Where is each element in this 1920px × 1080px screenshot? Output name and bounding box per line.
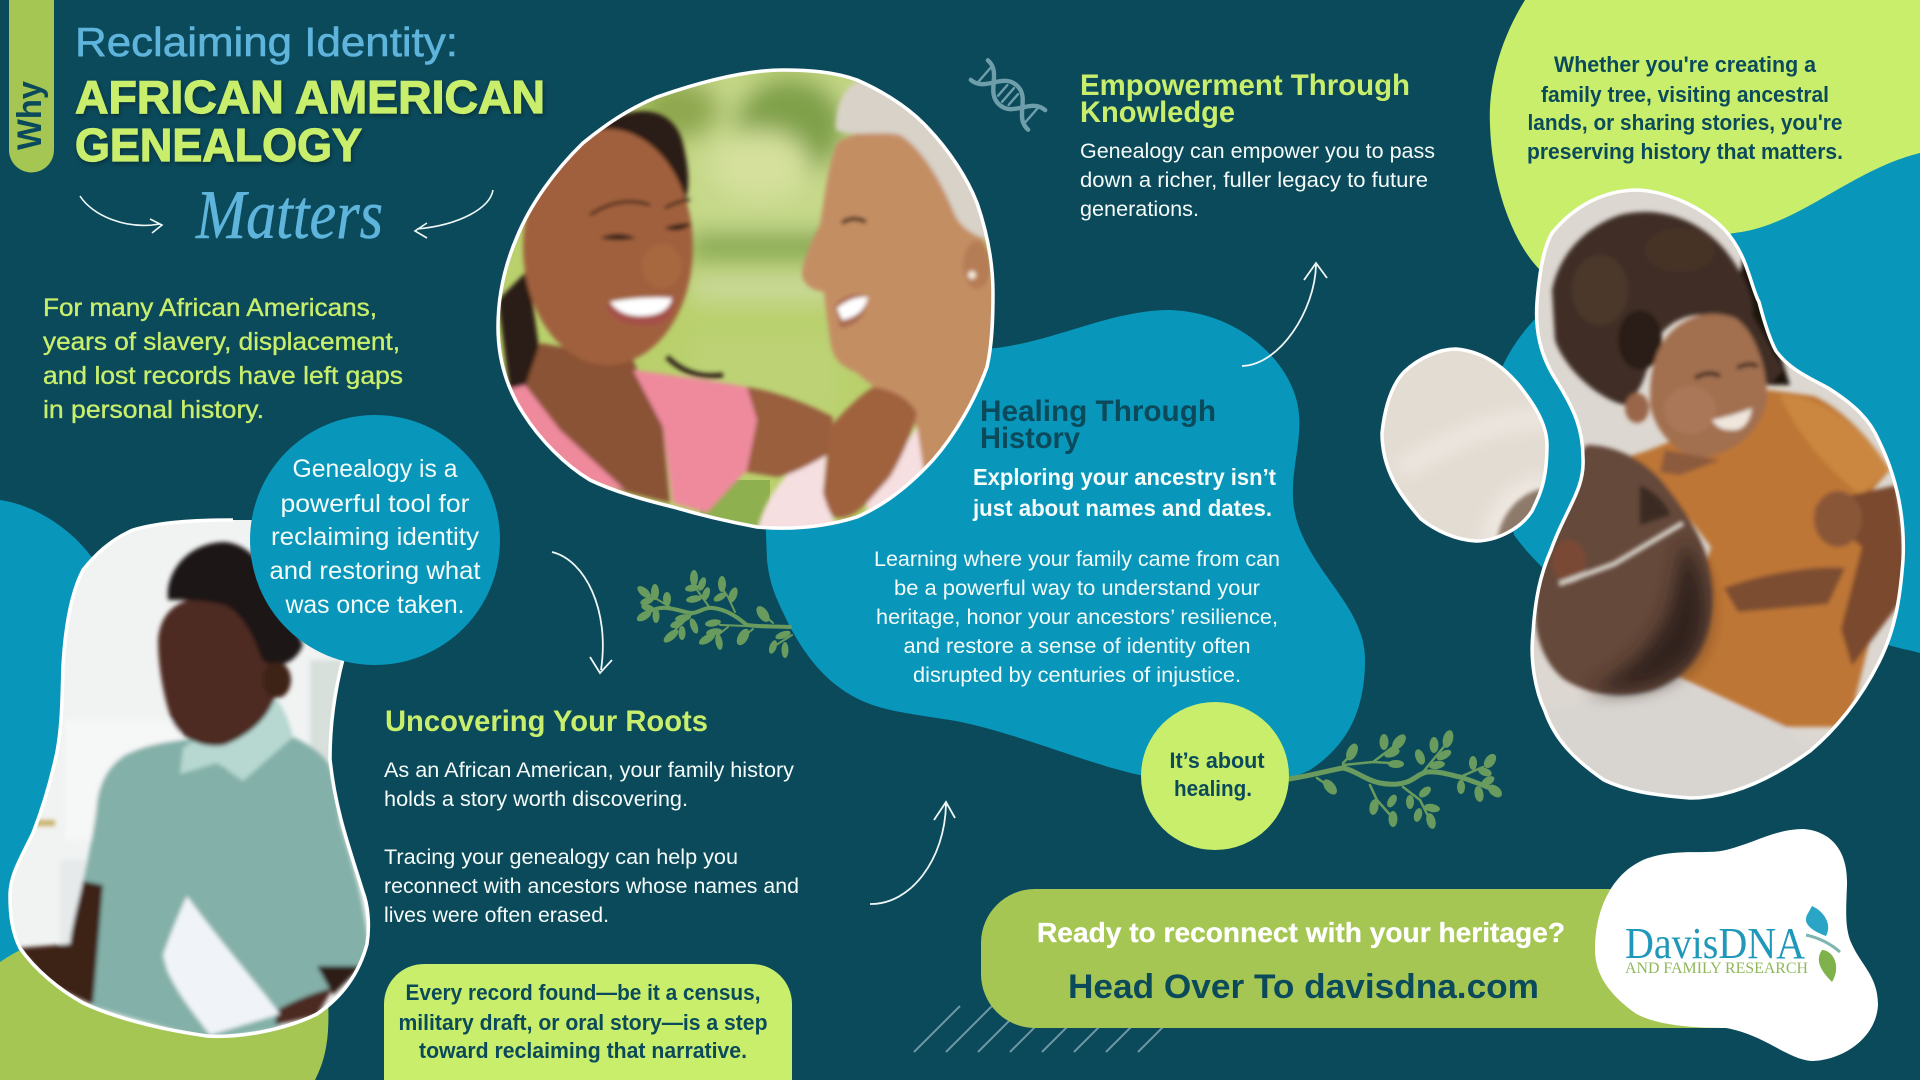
title: GENEALOGY xyxy=(75,119,362,171)
blob: top right lime xyxy=(1490,0,1920,270)
arrow: title left xyxy=(80,196,162,233)
icon: left branch xyxy=(635,570,792,658)
photo: father and child xyxy=(1525,185,1910,805)
section: Uncovering Your Roots: reconnect with ancestors whose names and xyxy=(384,874,799,898)
arrow: up to healing xyxy=(870,802,955,904)
callout: teal circle: powerful tool for xyxy=(280,490,470,518)
callout: top right text: preserving history that matters. xyxy=(1527,139,1843,164)
section: Empowerment Through Knowledge: Genealogy can empower you to pass xyxy=(1080,139,1435,163)
intro text xyxy=(43,294,403,424)
callout: top right text: lands, or sharing stories, you're xyxy=(1528,110,1842,135)
callout: top right text: family tree, visiting ancestral xyxy=(1541,82,1829,107)
title: Reclaiming Identity: xyxy=(75,19,458,65)
title: AFRICAN AMERICAN xyxy=(75,71,545,123)
section: Healing Through History: Exploring your ancestry isn’t xyxy=(973,464,1276,490)
callout: It's about healing: healing. xyxy=(1174,776,1252,801)
logo blob: AND FAMILY RESEARCH xyxy=(1625,960,1808,977)
section: Uncovering Your Roots: Uncovering Your Roots xyxy=(385,705,708,738)
section: Healing Through History: and restore a sense of identity often xyxy=(904,634,1250,658)
callout: teal circle: reclaiming identity xyxy=(271,523,480,551)
tab: Why: Why xyxy=(11,81,49,150)
blob: lower left lime xyxy=(0,945,328,1080)
section: Healing Through History: Healing Through xyxy=(980,395,1216,428)
section: Empowerment Through Knowledge: down a richer, fuller legacy to future xyxy=(1080,168,1428,192)
call to action pill: Ready to reconnect with your heritage? xyxy=(1037,917,1565,948)
section: Uncovering Your Roots: Tracing your genealogy can help you xyxy=(384,845,738,869)
callout: teal circle: and restoring what xyxy=(270,557,481,585)
callout: teal circle: Genealogy is a xyxy=(292,455,458,483)
photo: fabric oval xyxy=(1375,345,1555,545)
section: Healing Through History: disrupted by centuries of injustice. xyxy=(913,663,1241,687)
callout: top right text xyxy=(1527,52,1843,164)
callout: It's about healing xyxy=(1141,702,1289,850)
section: Healing Through History: History xyxy=(980,422,1080,455)
logo blob: DavisDNA xyxy=(1625,919,1805,968)
callout: It's about healing: It’s about xyxy=(1170,748,1265,773)
photo: man reading xyxy=(0,510,380,1050)
callout: every record xyxy=(384,964,792,1080)
intro text: in personal history. xyxy=(43,396,264,424)
intro text: For many African Americans, xyxy=(43,294,377,322)
section: Uncovering Your Roots: lives were often erased. xyxy=(384,903,609,927)
callout: every record: toward reclaiming that narrative. xyxy=(419,1038,747,1063)
blob: center teal xyxy=(765,310,1365,784)
section: Uncovering Your Roots: holds a story worth discovering. xyxy=(384,787,688,811)
callout: every record: Every record found—be it a census, xyxy=(406,980,760,1005)
title: Matters xyxy=(195,177,383,254)
intro text: and lost records have left gaps xyxy=(43,362,403,390)
section: Healing Through History xyxy=(874,395,1280,687)
callout: every record: military draft, or oral story—is a step xyxy=(398,1010,768,1035)
section: Empowerment Through Knowledge: Empowerment Through xyxy=(1080,69,1410,102)
section: Healing Through History: Learning where your family came from can xyxy=(874,547,1280,571)
blob: right teal xyxy=(1490,153,1920,700)
section: Healing Through History: be a powerful way to understand your xyxy=(894,576,1260,600)
blob: left teal xyxy=(0,500,97,962)
section: Healing Through History: just about names and dates. xyxy=(972,495,1272,521)
tab: Why xyxy=(9,0,54,172)
section: Uncovering Your Roots: As an African American, your family history xyxy=(384,758,794,782)
section: Uncovering Your Roots xyxy=(384,705,799,927)
callout: teal circle: was once taken. xyxy=(285,591,464,619)
call to action pill xyxy=(981,889,1726,1028)
logo blob xyxy=(1595,829,1878,1061)
call to action pill: Head Over To davisdna.com xyxy=(1068,968,1539,1006)
arrow: to empowerment xyxy=(1242,263,1327,366)
section: Healing Through History: heritage, honor your ancestors’ resilience, xyxy=(876,605,1278,629)
photo: two women xyxy=(490,60,1010,540)
section: Empowerment Through Knowledge xyxy=(1080,69,1435,221)
arrow: down to roots xyxy=(552,552,612,673)
title xyxy=(75,19,545,254)
arrow: title right xyxy=(415,190,493,238)
section: Empowerment Through Knowledge: Knowledge xyxy=(1080,96,1235,129)
callout: teal circle xyxy=(250,415,500,665)
icon: right branch xyxy=(1289,729,1504,830)
intro text: years of slavery, displacement, xyxy=(43,328,400,356)
icon: DNA helix xyxy=(971,60,1045,130)
section: Empowerment Through Knowledge: generations. xyxy=(1080,197,1199,221)
callout: top right text: Whether you're creating a xyxy=(1554,52,1817,77)
